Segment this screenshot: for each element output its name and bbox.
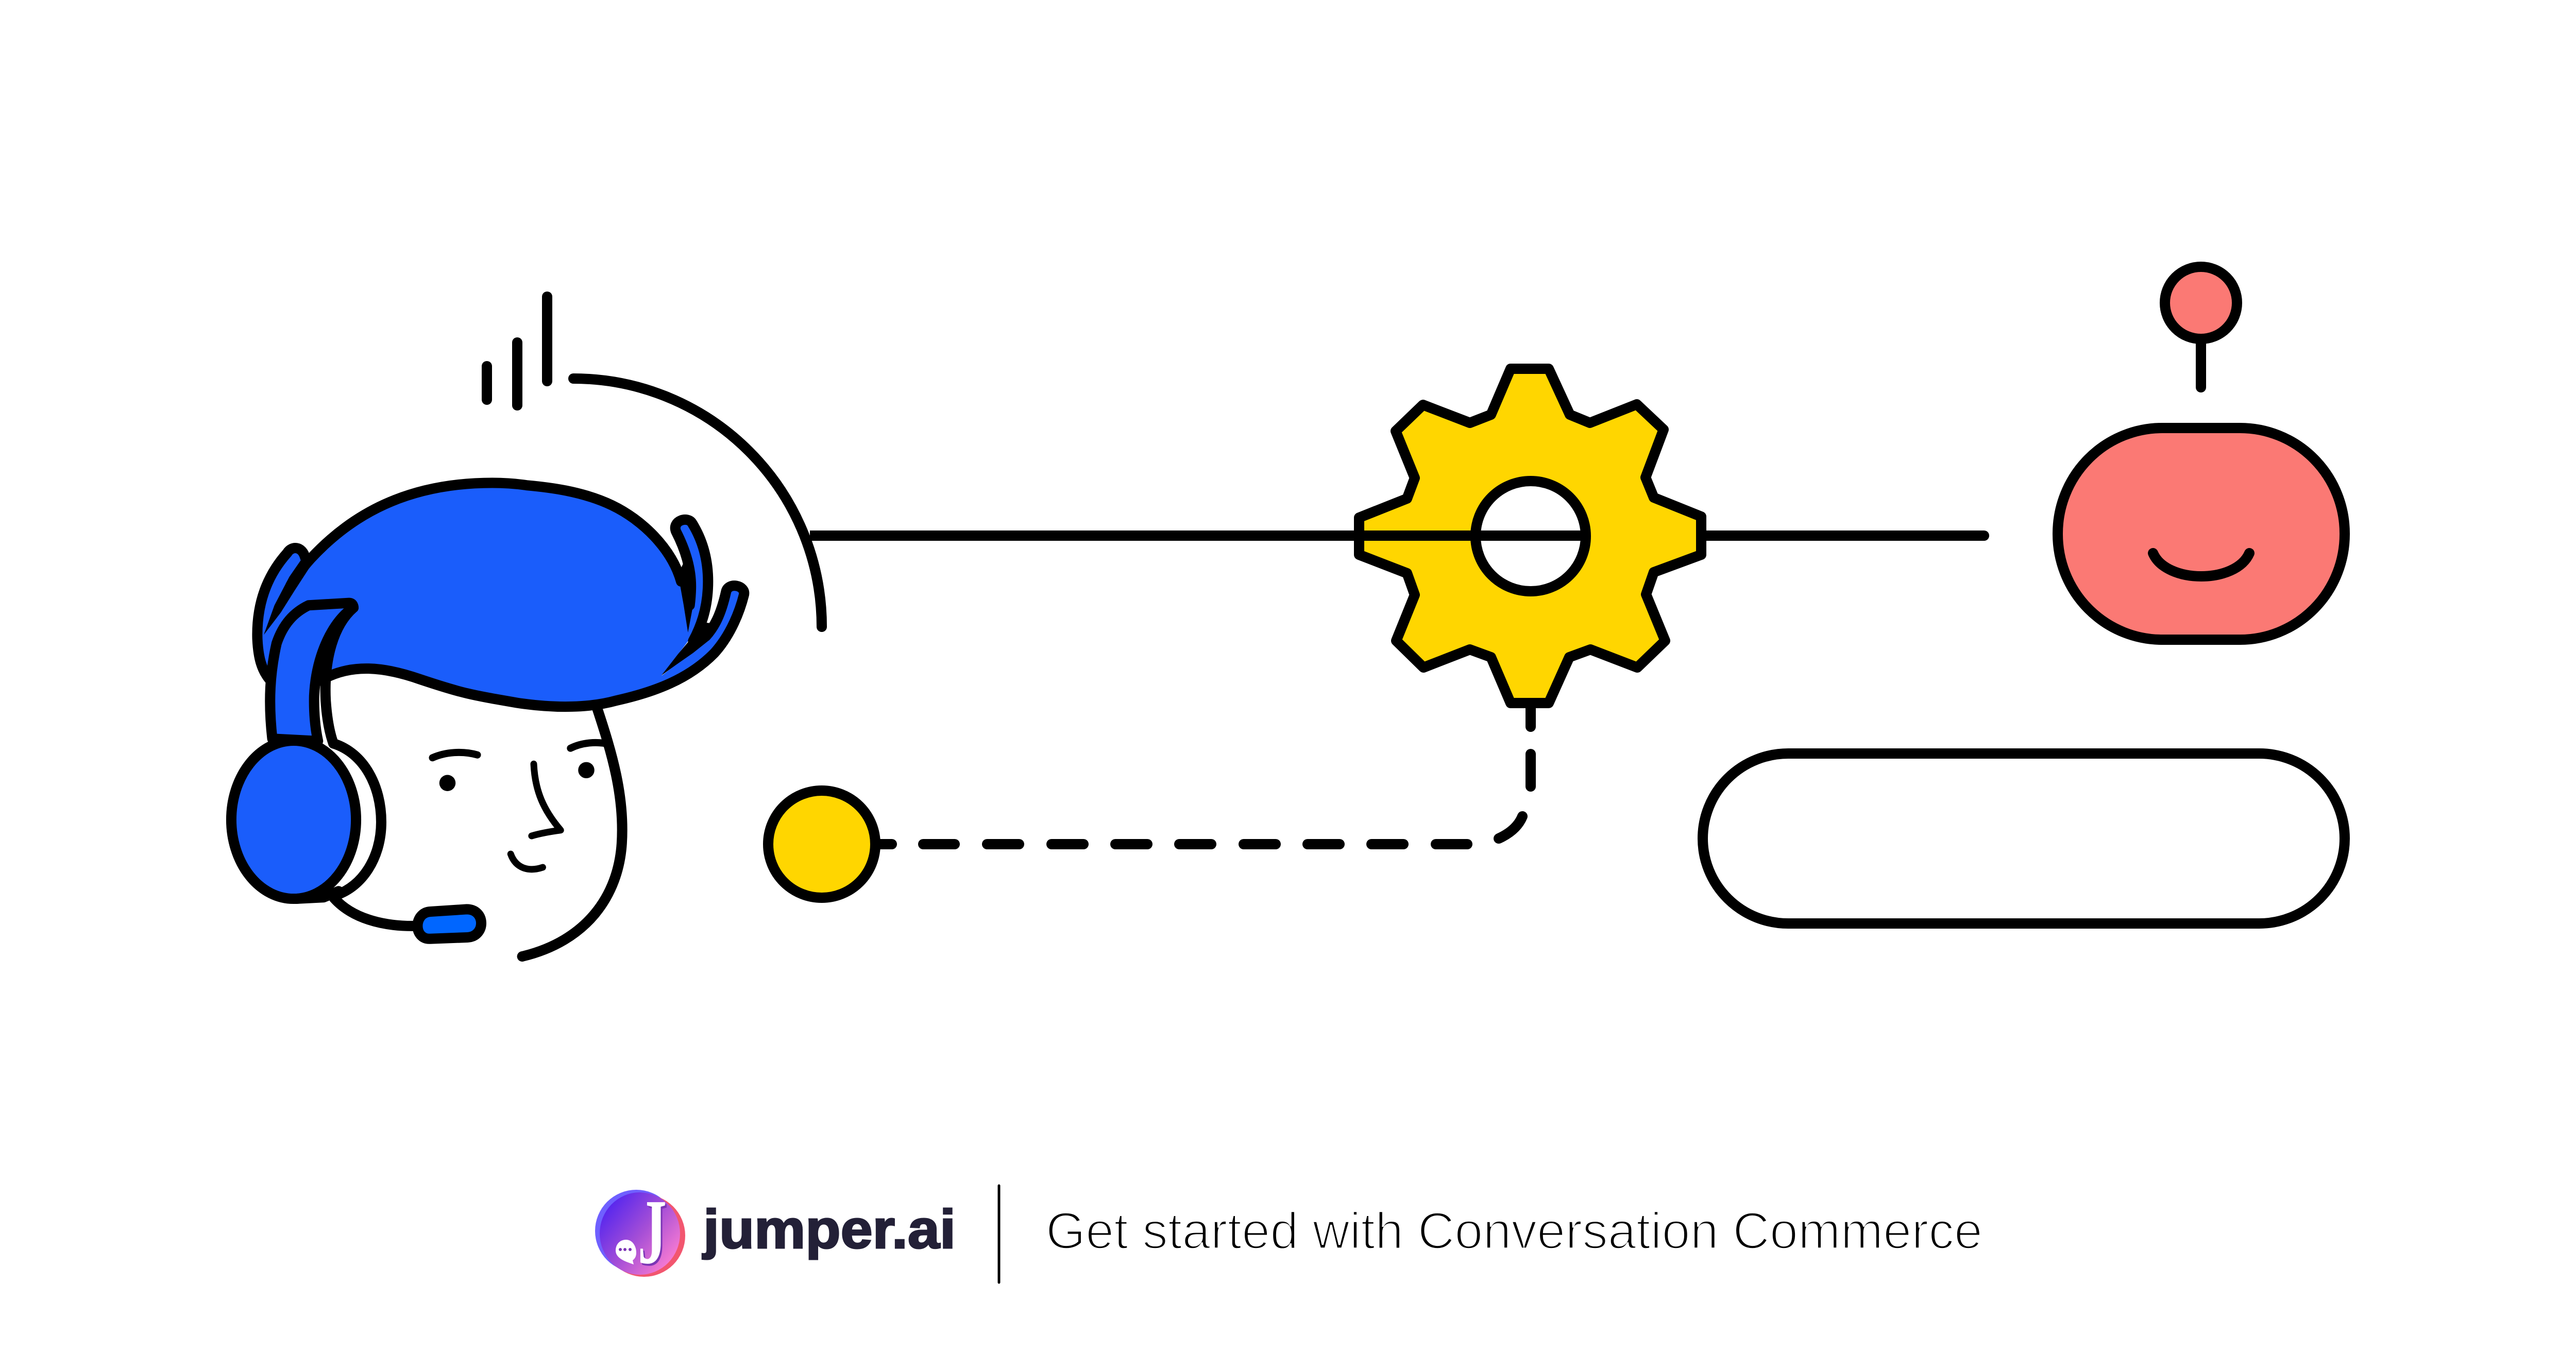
dashed connector from gear to yellow dot xyxy=(876,700,1531,844)
arc above the person xyxy=(573,379,822,627)
mouth xyxy=(511,854,543,869)
tagline: Get started with Conversation Commerce xyxy=(1046,1202,1982,1260)
main connector line through gear xyxy=(810,530,1585,541)
right eye xyxy=(578,762,595,778)
left eye xyxy=(439,775,455,791)
person with headset xyxy=(231,483,744,956)
wordmark: jumper.ai xyxy=(702,1199,956,1260)
left hair wedge xyxy=(264,560,313,635)
headband xyxy=(270,603,353,744)
connector line right of gear xyxy=(1695,530,1984,541)
gear icon xyxy=(1359,369,1701,703)
microphone xyxy=(417,909,481,939)
empty chat bubble pill xyxy=(1703,754,2345,923)
ear xyxy=(333,744,381,895)
logo mark xyxy=(595,1181,685,1283)
logo letter J: J xyxy=(638,1181,667,1283)
face outline xyxy=(522,708,622,956)
right eyebrow xyxy=(570,743,610,748)
hair xyxy=(257,483,744,707)
logo speech bubble xyxy=(616,1240,636,1264)
nose xyxy=(532,764,561,836)
microphone boom xyxy=(334,898,417,926)
signal bars xyxy=(487,297,547,405)
robot antenna xyxy=(2165,267,2237,387)
robot head xyxy=(2058,428,2345,640)
hair spike xyxy=(678,562,695,632)
footer divider xyxy=(997,1186,1001,1282)
ear cup xyxy=(231,741,356,899)
right hair wedge xyxy=(662,622,719,675)
left eyebrow xyxy=(432,752,478,758)
yellow node xyxy=(768,791,875,898)
